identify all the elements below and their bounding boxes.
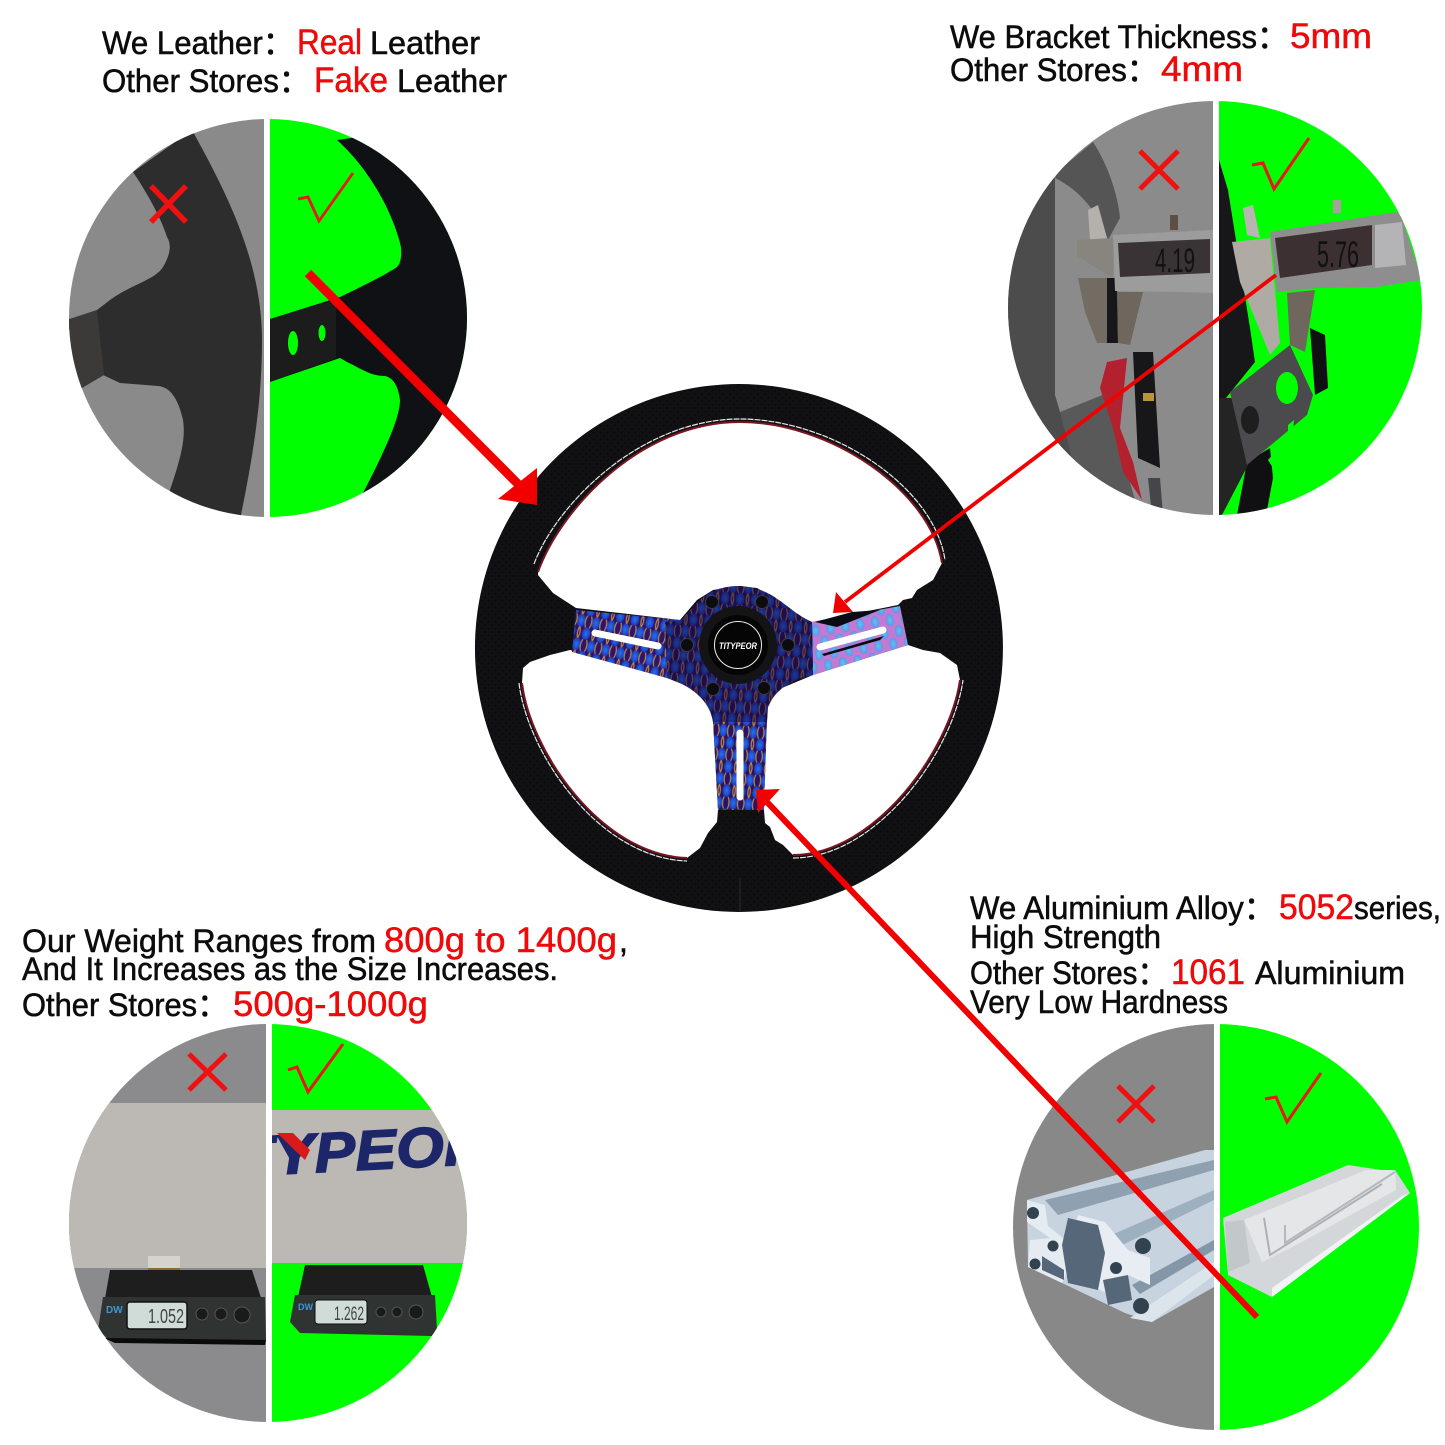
horn button — [699, 606, 777, 684]
heading: bracket thickness comparison: We Bracket Thickness： — [950, 19, 1288, 55]
horn button: TITYPEOR — [719, 641, 757, 651]
photo: 5mm bracket with caliper: 5.76 — [1317, 234, 1359, 275]
icon: red check — [288, 1044, 343, 1092]
photo: 5mm bracket with caliper — [1219, 95, 1432, 525]
panel: aluminium alloy comparison circle — [1005, 1015, 1429, 1440]
heading: leather comparison: We Leather： — [102, 25, 294, 61]
icon: red check — [1252, 138, 1309, 189]
photo: heavier wheel on scale: DW — [298, 1302, 313, 1312]
heading: bracket thickness comparison: Other Stores： — [950, 52, 1158, 88]
panel: bracket thickness comparison circle — [1000, 95, 1432, 525]
photo: lighter wheel on scale — [60, 1015, 266, 1435]
spoke: left — [572, 610, 680, 678]
rim seam — [739, 878, 741, 912]
icon: red cross — [1140, 151, 1178, 189]
heading: aluminium alloy comparison: High Strength — [970, 919, 1161, 955]
heading: aluminium alloy comparison: 5052 — [1279, 888, 1354, 927]
photo: heavier wheel on scale: TYPEOR — [235, 1112, 490, 1188]
icon: red check — [298, 173, 353, 221]
heading: weight comparison: Our Weight Ranges from — [22, 923, 376, 959]
arrow: to rim leather — [308, 273, 537, 505]
icon: red cross — [151, 186, 186, 222]
icon: red cross — [189, 1054, 226, 1090]
heading: aluminium alloy comparison: Aluminium — [1255, 955, 1405, 991]
spoke: bottom — [713, 720, 767, 810]
heading: weight comparison: 500g-1000g — [233, 985, 428, 1024]
arrow: to bracket — [833, 275, 1276, 613]
heading: aluminium alloy comparison — [970, 888, 1441, 1020]
steering wheel — [475, 384, 1003, 912]
photo: real leather wheel on green — [270, 119, 467, 517]
bolts — [680, 596, 794, 696]
white stitching — [519, 419, 963, 861]
photo: fake leather wheel on grey — [60, 110, 264, 530]
heading: weight comparison — [22, 921, 628, 1024]
right spoke reflections — [815, 610, 884, 656]
heading: aluminium alloy comparison: Other Stores： — [970, 955, 1167, 991]
heading: aluminium alloy comparison: Very Low Hardness — [970, 984, 1228, 1020]
red stitching — [522, 422, 960, 858]
heading: bracket thickness comparison: 4mm — [1161, 50, 1243, 89]
heading: aluminium alloy comparison: 1061 — [1171, 953, 1245, 992]
heading: leather comparison: Fake — [314, 61, 388, 100]
photo: 5052 aluminium profile — [1005, 1015, 1214, 1440]
heading: aluminium alloy comparison: We Aluminium Alloy： — [970, 890, 1275, 926]
photo: heavier wheel on scale: 1.262 — [334, 1304, 364, 1325]
wheel rim with openings — [475, 384, 1003, 912]
panel: weight comparison circle — [69, 1024, 467, 1422]
spoke: right — [812, 606, 908, 675]
icon: red cross — [1118, 1086, 1154, 1122]
photo: lighter wheel on scale: DW — [106, 1305, 123, 1316]
heading: leather comparison — [102, 23, 507, 100]
spoke slots — [595, 630, 883, 797]
heading: weight comparison: And It Increases as the Size Increases. — [22, 951, 558, 987]
photo: heavier wheel on scale — [272, 1024, 467, 1422]
heading: weight comparison: , — [619, 923, 628, 959]
heading: leather comparison: Other Stores： — [102, 63, 310, 99]
heading: weight comparison: Other Stores： — [22, 987, 228, 1023]
photo: 1061 aluminium angle bars — [1220, 1015, 1429, 1440]
heading: weight comparison: 800g to 1400g — [384, 921, 617, 960]
hub — [665, 586, 813, 722]
heading: leather comparison: Leather — [370, 25, 480, 61]
icon: red check — [1265, 1073, 1321, 1122]
photo: 4mm bracket with caliper: 4.19 — [1155, 242, 1195, 280]
panel: leather comparison circle — [69, 119, 467, 517]
arrow: to spoke aluminium — [756, 789, 1257, 1317]
heading: leather comparison: Real — [297, 23, 362, 62]
heading: bracket thickness comparison: 5mm — [1290, 17, 1372, 56]
photo: 4mm bracket with caliper — [1000, 95, 1213, 525]
photo: lighter wheel on scale: 1.052 — [148, 1306, 184, 1328]
heading: leather comparison: Leather — [397, 63, 507, 99]
heading: bracket thickness comparison — [950, 17, 1372, 89]
